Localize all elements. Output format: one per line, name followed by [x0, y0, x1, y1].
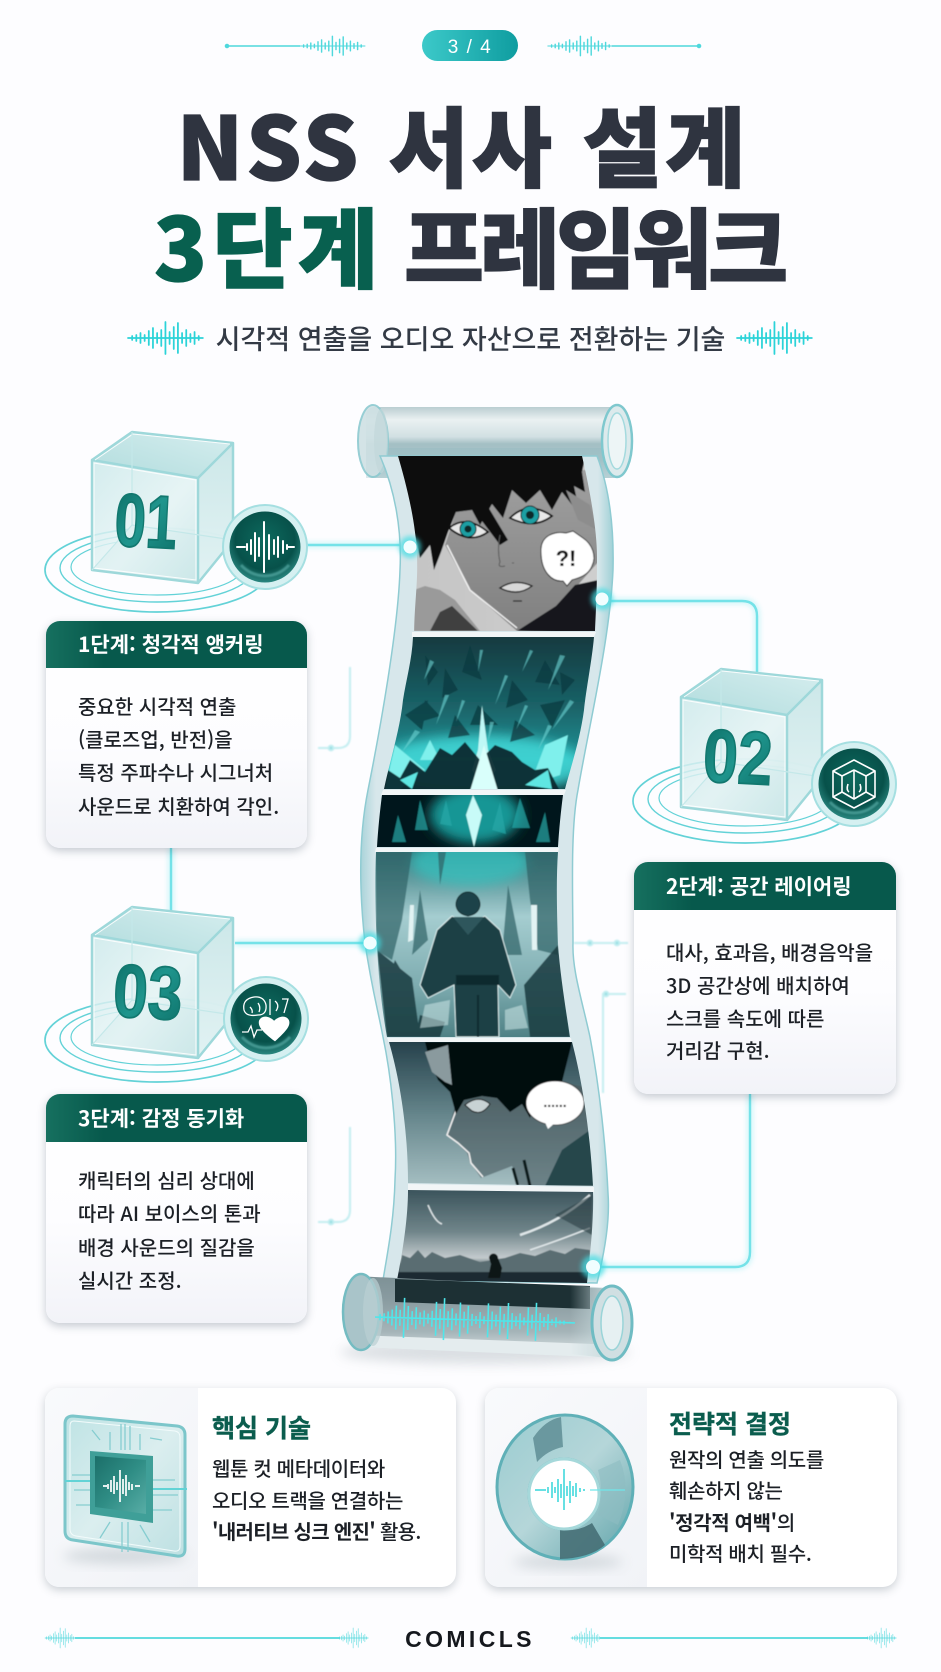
faint connectors — [318, 667, 628, 1224]
step 2 text: 대사, 효과음, 배경음악을 — [666, 937, 873, 966]
step 1 platform rings — [45, 528, 269, 612]
card: step 2 — [634, 862, 896, 1094]
header wave left — [226, 36, 365, 56]
speech bubble ellipsis: ...... — [543, 1094, 567, 1110]
page pill — [422, 30, 518, 61]
strategic decision line 2: 훼손하지 않는 — [669, 1475, 783, 1504]
speech bubble ?!: ?! — [556, 546, 576, 571]
film shadow — [340, 1340, 630, 1364]
step 3 text: 캐릭터의 심리 상대에 — [78, 1165, 255, 1194]
step 2 text line 3: 스크를 속도에 따른 — [666, 1003, 824, 1032]
header wave right — [548, 36, 700, 56]
node 3 — [359, 932, 381, 954]
icon: glass ring — [496, 1414, 634, 1573]
top glass roller — [358, 405, 632, 478]
manga panel 1: close-up face — [395, 454, 600, 634]
speech bubble ellipsis — [526, 1081, 584, 1129]
subtitle wave left — [128, 322, 203, 354]
subtitle: 시각적 연출을 오디오 자산으로 전환하는 기술 — [216, 318, 725, 357]
subtitle wave right — [737, 322, 812, 354]
core technology line 3: '내러티브 싱크 엔진' 활용. — [212, 1516, 421, 1545]
bottom glass roller — [343, 1274, 632, 1360]
card: step 1 — [46, 621, 307, 848]
side panel with ring icon — [485, 1388, 647, 1587]
card: strategic decision — [485, 1388, 897, 1587]
step 1 text: 중요한 시각적 연출 — [78, 691, 236, 720]
step 2 text line 2: 3D 공간상에 배치하여 — [666, 970, 850, 999]
manga panel 4: figure from behind — [375, 852, 570, 1037]
footer wave left — [45, 1628, 368, 1648]
core technology text: 웹툰 컷 메타데이터와 — [212, 1453, 385, 1482]
footer wave right — [571, 1628, 896, 1648]
step 1 heading — [46, 621, 307, 668]
footer brand: COMICLS — [405, 1626, 535, 1652]
step 2 glass cube — [681, 669, 822, 820]
page number: 3 / 4 — [448, 37, 492, 58]
step 2 icon: spatial cube — [812, 742, 896, 826]
step 2 heading: 2단계: 공간 레이어링 — [666, 871, 852, 901]
roller waveform — [374, 1296, 576, 1344]
step 2 number: 02 — [701, 713, 775, 801]
manga panel 6: horizon silhouette — [395, 1188, 595, 1286]
strategic decision text: 원작의 연출 의도를 — [669, 1444, 824, 1473]
step 3 heading — [46, 1094, 307, 1142]
core technology line 2: 오디오 트랙을 연결하는 — [212, 1485, 403, 1514]
step 1 heading: 1단계: 청각적 앵커링 — [78, 629, 264, 659]
header page indicator — [226, 30, 700, 61]
step 3 heading: 3단계: 감정 동기화 — [78, 1103, 244, 1133]
card: core technology — [45, 1388, 456, 1587]
manga panel 3: dark shards — [377, 795, 563, 847]
speech bubble ?! — [541, 531, 594, 586]
right eye — [510, 506, 552, 524]
node 1 — [399, 536, 421, 558]
step 3 text line 2: 따라 AI 보이스의 톤과 — [78, 1198, 261, 1227]
strategic decision line 4: 미학적 배치 필수. — [669, 1538, 811, 1567]
title line 2: 프레임워크 — [404, 181, 784, 307]
left eye — [449, 521, 488, 538]
title accent: 3단계 — [154, 181, 384, 307]
panel gaps — [375, 632, 596, 1192]
step 2 text line 4: 거리감 구현. — [666, 1035, 770, 1064]
step 2 heading — [634, 862, 896, 910]
step 3 icon: emotion — [224, 977, 308, 1061]
core technology title: 핵심 기술 — [212, 1409, 311, 1445]
step 1 text line 3: 특정 주파수나 시그너처 — [78, 757, 273, 786]
title line 1: NSS 서사 설계 — [177, 80, 748, 206]
connector glow lines — [171, 545, 757, 1267]
film ribbon — [361, 456, 613, 1283]
step 1 text line 4: 사운드로 치환하여 각인. — [78, 791, 279, 820]
step 1 text line 2: (클로즈업, 반전)을 — [78, 724, 233, 753]
manga panel 5: profile face — [385, 1040, 600, 1190]
step 3 text line 3: 배경 사운드의 질감을 — [78, 1232, 255, 1261]
title — [154, 80, 786, 307]
step 2 platform rings — [633, 759, 857, 843]
step 3 text line 4: 실시간 조정. — [78, 1265, 182, 1294]
step 1 glass cube — [92, 432, 233, 583]
node 2 — [591, 588, 613, 610]
step 3 glass cube — [92, 907, 233, 1058]
film strip scroll — [340, 405, 632, 1364]
strategic decision line 3: '정각적 여백'의 — [669, 1507, 795, 1536]
manga panel 2: crystal burst — [384, 637, 594, 789]
side panel with chip icon — [45, 1388, 198, 1587]
icon: glass chip — [64, 1414, 187, 1568]
card: step 3 — [46, 1094, 307, 1323]
figure — [420, 892, 516, 1037]
step 3 number: 03 — [111, 948, 185, 1036]
step 1 number: 01 — [113, 477, 179, 565]
node 4 — [581, 1255, 605, 1279]
step 3 platform rings — [45, 998, 269, 1082]
strategic decision title: 전략적 결정 — [669, 1405, 791, 1441]
step 1 icon: waveform — [223, 505, 307, 589]
